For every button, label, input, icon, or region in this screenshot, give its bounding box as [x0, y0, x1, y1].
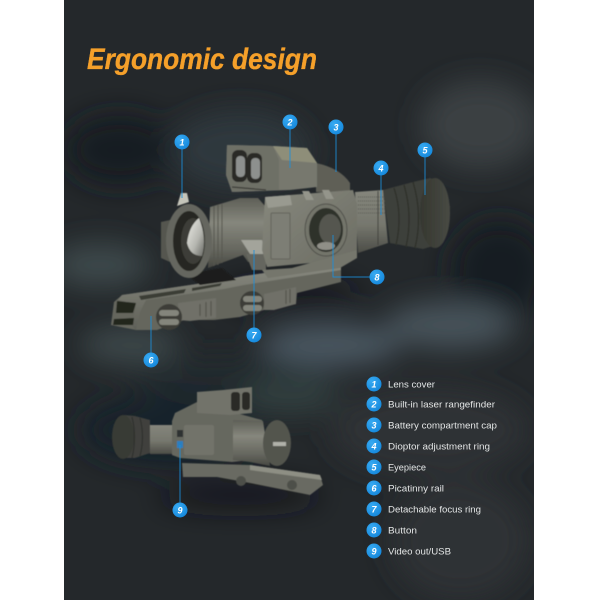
- rangefinder: [226, 145, 317, 192]
- legend item 4: Dioptor adjustment ring: [388, 442, 490, 452]
- marker 5: [418, 142, 432, 158]
- marker 7: [246, 328, 262, 342]
- marker 8: [370, 270, 384, 284]
- legend item 4: [366, 438, 490, 454]
- legend item 2: Built-in laser rangefinder: [388, 400, 496, 410]
- body: [172, 402, 267, 462]
- leader lines: [151, 128, 425, 504]
- marker 6: 6: [148, 356, 154, 366]
- dioptre focus ring: [355, 190, 388, 253]
- legend item 5: [366, 460, 426, 474]
- legend: [366, 376, 497, 558]
- legend item 2: [366, 396, 496, 412]
- legend item 6: [366, 480, 444, 496]
- main body: [262, 190, 357, 278]
- legend item 7: Detachable focus ring: [388, 504, 481, 516]
- marker 7: 7: [251, 330, 257, 340]
- focus ring on body: [305, 204, 347, 256]
- legend item 1: Lens cover: [388, 380, 436, 390]
- rail mount: [111, 262, 341, 330]
- legend item 3: 3: [371, 420, 377, 430]
- lens barrel and cap: [233, 420, 291, 466]
- legend item 1: 1: [371, 380, 377, 390]
- battery cap: [316, 163, 350, 194]
- legend item 7: [366, 502, 481, 516]
- marker 2: 2: [286, 118, 293, 128]
- marker 8: 8: [374, 272, 380, 282]
- marker 5: 5: [422, 146, 428, 156]
- legend item 9: [366, 544, 451, 558]
- rail levers: [178, 287, 296, 321]
- legend item 3: Battery compartment cap: [388, 420, 497, 432]
- legend item 8: Button: [388, 526, 417, 536]
- objective barrel: [208, 198, 266, 270]
- legend item 9: Video out/USB: [388, 546, 451, 558]
- marker 6: [144, 352, 158, 368]
- marker 9: 9: [177, 506, 183, 516]
- legend item 7: 7: [371, 504, 377, 514]
- focus ring: [150, 425, 173, 454]
- title: Ergonomic design: [87, 43, 317, 76]
- legend item 6: Picatinny rail: [388, 484, 444, 494]
- lens cover tab: [177, 193, 189, 206]
- marker 4: 4: [377, 164, 384, 174]
- legend item 2: 2: [370, 400, 377, 410]
- eyepiece: [383, 178, 450, 249]
- legend item 8: 8: [371, 526, 377, 536]
- small scope illustration: [112, 387, 323, 495]
- callout markers on the scope: [144, 114, 432, 518]
- legend item 5: Eyepiece: [388, 462, 426, 474]
- rail: [182, 463, 323, 495]
- rangefinder: [197, 387, 252, 415]
- legend item 8: [366, 522, 417, 538]
- main scope illustration: [111, 145, 450, 330]
- legend item 9: 9: [371, 546, 377, 556]
- legend item 5: 5: [371, 462, 377, 472]
- legend item 6: 6: [371, 484, 377, 494]
- marker 2: [282, 114, 298, 130]
- rail wheels: [156, 291, 264, 330]
- marker 4: [374, 160, 388, 176]
- marker 1: [174, 134, 190, 150]
- legend item 3: [366, 418, 497, 432]
- marker 1: 1: [179, 138, 185, 148]
- legend item 1: [366, 376, 436, 392]
- objective lens: [161, 204, 212, 278]
- marker 3: 3: [333, 122, 339, 132]
- legend item 4: 4: [370, 442, 377, 452]
- marker 9: [172, 502, 188, 518]
- marker 3: [328, 120, 344, 134]
- eyepiece: [112, 415, 150, 459]
